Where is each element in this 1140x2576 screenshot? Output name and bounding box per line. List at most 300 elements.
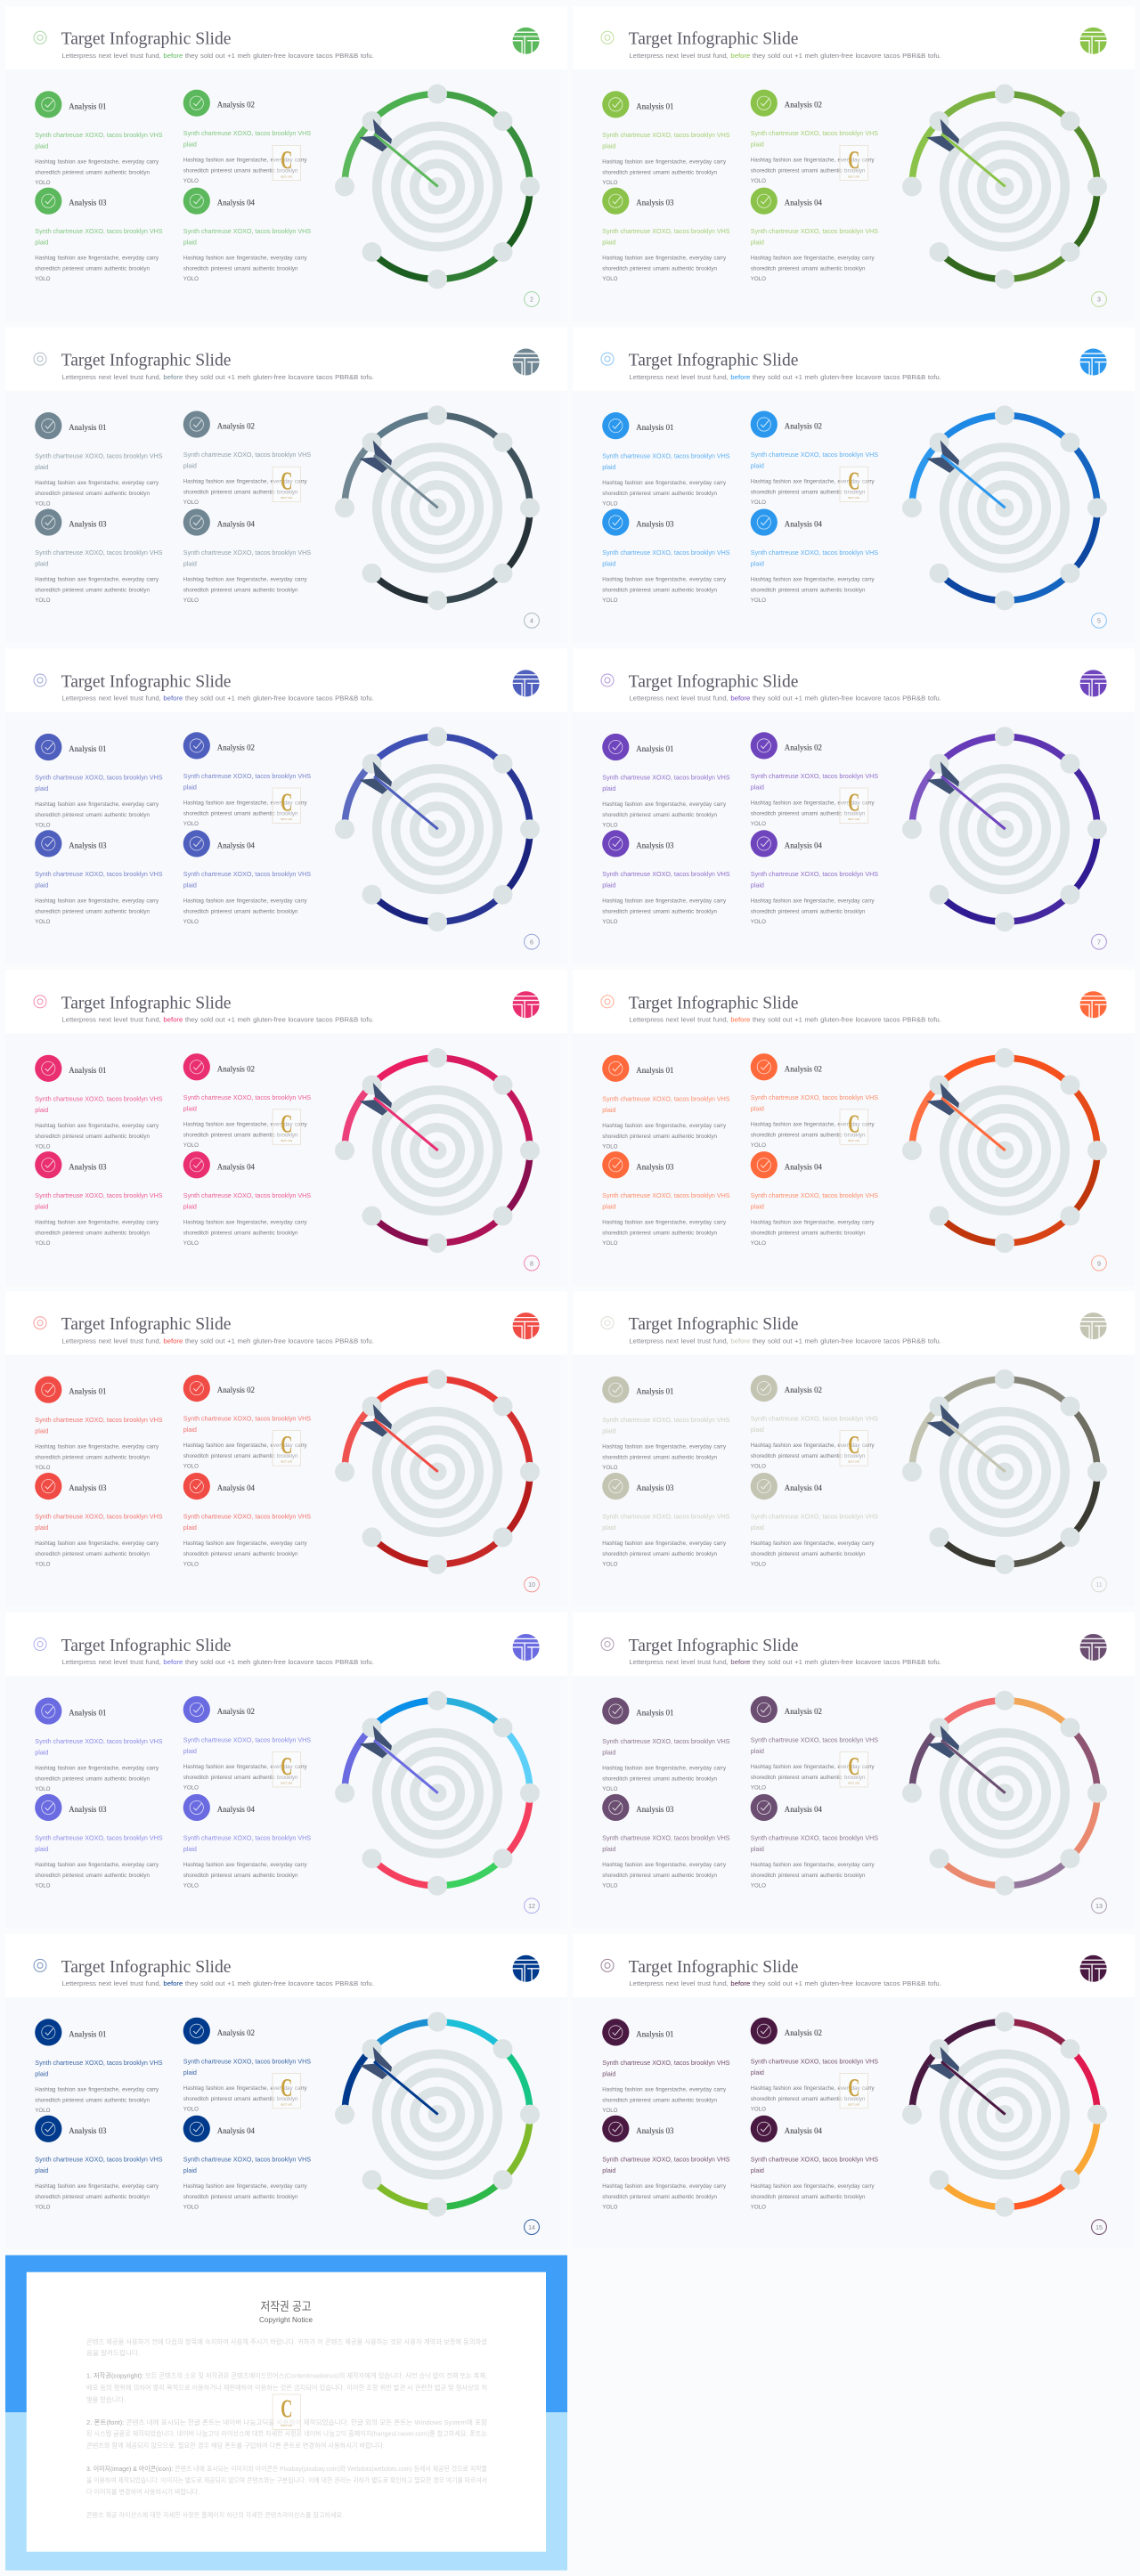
analysis 02: shoreditch pinterest umami authentic brooklyn <box>751 810 866 817</box>
analysis 04: Analysis 04 <box>217 841 256 849</box>
analysis 02: Hashtag fashion axe fingerstache, everyday carry <box>183 2085 308 2092</box>
analysis 02: Synth chartreuse XOXO, tacos brooklyn VHS <box>751 1094 878 1101</box>
analysis 01: Analysis 01 <box>69 102 106 110</box>
analysis 04: Analysis 04 <box>217 2126 256 2135</box>
analysis 02: Analysis 02 <box>217 101 255 110</box>
analysis 03: Analysis 03 <box>636 199 674 207</box>
watermark <box>273 1431 301 1466</box>
title: Target Infographic Slide <box>629 1958 799 1977</box>
analysis 01: plaid <box>602 1750 615 1757</box>
analysis 02: plaid <box>751 1748 764 1755</box>
analysis 01: shoreditch pinterest umami authentic brooklyn <box>35 1776 150 1783</box>
analysis 01 <box>602 2019 730 2114</box>
analysis 01: Analysis 01 <box>69 1066 106 1075</box>
analysis 02: Synth chartreuse XOXO, tacos brooklyn VHS <box>183 2058 311 2065</box>
analysis 03: Hashtag fashion axe fingerstache, everyday carry <box>35 898 159 904</box>
analysis 04: Analysis 04 <box>785 2126 823 2135</box>
analysis 04: Synth chartreuse XOXO, tacos brooklyn VHS <box>751 1514 878 1521</box>
analysis 01: shoreditch pinterest umami authentic brooklyn <box>602 1134 717 1140</box>
analysis 02: plaid <box>183 2069 197 2076</box>
icon: target bullet <box>601 995 614 1008</box>
analysis 02: Analysis 02 <box>785 1386 822 1394</box>
icon: logo <box>1080 1634 1107 1661</box>
analysis 02: Hashtag fashion axe fingerstache, everyday carry <box>183 1764 308 1770</box>
analysis 01: Analysis 01 <box>636 1066 673 1075</box>
analysis 02: Hashtag fashion axe fingerstache, everyday carry <box>751 479 875 485</box>
analysis 04: Synth chartreuse XOXO, tacos brooklyn VHS <box>183 1192 311 1199</box>
icon: target bullet <box>34 995 46 1008</box>
analysis 01 <box>35 1055 163 1150</box>
analysis 04: shoreditch pinterest umami authentic brooklyn <box>751 1230 866 1236</box>
analysis 01: Hashtag fashion axe fingerstache, everyday carry <box>35 2086 159 2092</box>
icon: target bullet <box>34 674 46 687</box>
watermark <box>840 1109 867 1144</box>
analysis 01: shoreditch pinterest umami authentic brooklyn <box>602 2097 717 2103</box>
analysis 01: YOLO <box>35 823 51 829</box>
page number <box>1092 1898 1106 1914</box>
analysis 01: shoreditch pinterest umami authentic brooklyn <box>35 1455 150 1461</box>
analysis 02: Hashtag fashion axe fingerstache, everyday carry <box>183 800 308 806</box>
analysis 01: Analysis 01 <box>636 1709 673 1718</box>
analysis 03: Hashtag fashion axe fingerstache, everyday carry <box>602 1540 727 1547</box>
title: Target Infographic Slide <box>61 994 232 1012</box>
analysis 01: plaid <box>602 1428 615 1435</box>
analysis 04: YOLO <box>751 1882 766 1889</box>
analysis 03: Analysis 03 <box>69 1483 107 1492</box>
analysis 04: YOLO <box>183 919 199 925</box>
analysis 01: YOLO <box>35 1786 51 1792</box>
analysis 04: Synth chartreuse XOXO, tacos brooklyn VHS <box>751 1192 878 1199</box>
analysis 02 <box>183 1053 311 1149</box>
analysis 02: Analysis 02 <box>785 2028 822 2037</box>
analysis 03: YOLO <box>602 597 618 604</box>
analysis 01: Synth chartreuse XOXO, tacos brooklyn VHS <box>602 132 730 139</box>
watermark: C <box>281 1431 292 1459</box>
analysis 01 <box>35 734 163 828</box>
notice item 1: 배포 등의 행위에 의하여 영리 목적으로 이용하거나 재판매하여 이용하는 것은 금지되어 있습니다. 이러한 조항 위반 발견 시 관련한 법규 및 형사상의 처 <box>86 2383 487 2392</box>
analysis 04: Analysis 04 <box>785 1162 823 1171</box>
analysis 01: YOLO <box>602 1143 618 1150</box>
analysis 03: Hashtag fashion axe fingerstache, everyday carry <box>35 256 159 262</box>
analysis 02: Synth chartreuse XOXO, tacos brooklyn VHS <box>751 2058 878 2065</box>
analysis 04 <box>183 2116 311 2210</box>
analysis 03: shoreditch pinterest umami authentic brooklyn <box>35 1230 150 1236</box>
subtitle: Letterpress next level trust fund, before they sold out +1 meh gluten-free locavore tacos PBR&B tofu. <box>629 695 941 703</box>
watermark <box>840 145 867 181</box>
analysis 01: Hashtag fashion axe fingerstache, everyday carry <box>35 1766 159 1772</box>
analysis 03: plaid <box>602 1846 615 1853</box>
analysis 04: Analysis 04 <box>217 1805 256 1814</box>
analysis 03: Hashtag fashion axe fingerstache, everyday carry <box>35 577 159 583</box>
subtitle: Letterpress next level trust fund, before they sold out +1 meh gluten-free locavore tacos PBR&B tofu. <box>61 1337 374 1345</box>
target chart with arrow <box>902 727 1107 931</box>
notice item 2: 콘텐츠와 함께 제공되지 않으므로, 필요한 경우 해당 폰트를 구입하여 다른 폰트로 변경하여 사용하시기 바랍니다. <box>86 2441 385 2450</box>
analysis 04: plaid <box>751 1524 764 1532</box>
analysis 03: shoreditch pinterest umami authentic brooklyn <box>602 908 717 914</box>
analysis 03: Hashtag fashion axe fingerstache, everyday carry <box>602 898 727 904</box>
analysis 01: shoreditch pinterest umami authentic brooklyn <box>602 1776 717 1783</box>
title: Target Infographic Slide <box>629 1315 799 1334</box>
analysis 02: Hashtag fashion axe fingerstache, everyday carry <box>751 800 875 806</box>
analysis 04: Hashtag fashion axe fingerstache, everyday carry <box>751 1540 875 1547</box>
analysis 04 <box>751 830 878 925</box>
analysis 04 <box>751 2116 878 2210</box>
analysis 02: Analysis 02 <box>217 2028 255 2037</box>
analysis 02: plaid <box>183 1426 197 1434</box>
watermark: C <box>281 2074 292 2102</box>
analysis 02: Hashtag fashion axe fingerstache, everyday carry <box>183 158 308 164</box>
analysis 04: Analysis 04 <box>785 1483 823 1492</box>
analysis 01: Analysis 01 <box>69 1387 106 1396</box>
icon: target bullet <box>34 31 46 44</box>
notice item 3: 3. 이미지(image) & 아이콘(icon): 콘텐츠 내에 표시되는 이미지와 아이콘은 Pixabay(pixabay.com)와 Webdots(webdots.com) 등에서 제공된 것으로 저작물 <box>86 2464 487 2473</box>
analysis 02: Hashtag fashion axe fingerstache, everyday carry <box>751 1764 875 1770</box>
analysis 04: Analysis 04 <box>217 1162 256 1171</box>
analysis 03: plaid <box>35 1846 48 1853</box>
analysis 02: shoreditch pinterest umami authentic brooklyn <box>183 2096 298 2102</box>
analysis 01: YOLO <box>602 823 618 829</box>
analysis 02: YOLO <box>751 821 766 827</box>
watermark: BEST LIFE <box>281 1782 293 1785</box>
analysis 04: shoreditch pinterest umami authentic brooklyn <box>751 1551 866 1557</box>
watermark: BEST LIFE <box>848 1782 860 1785</box>
analysis 04: plaid <box>183 882 197 889</box>
title: Target Infographic Slide <box>61 30 232 49</box>
icon: logo <box>513 28 540 54</box>
watermark <box>840 1431 867 1466</box>
analysis 02 <box>183 90 311 184</box>
analysis 03: Analysis 03 <box>636 841 674 849</box>
watermark: C <box>848 146 859 175</box>
analysis 02: YOLO <box>751 1142 766 1149</box>
analysis 02: YOLO <box>751 500 766 506</box>
slide 6: indigo <box>5 648 567 963</box>
icon: logo <box>1080 991 1107 1018</box>
analysis 04: Synth chartreuse XOXO, tacos brooklyn VHS <box>751 2156 878 2163</box>
watermark: C <box>848 1752 859 1781</box>
analysis 03: shoreditch pinterest umami authentic brooklyn <box>35 908 150 914</box>
watermark <box>273 467 301 502</box>
analysis 03: Synth chartreuse XOXO, tacos brooklyn VHS <box>602 549 730 557</box>
analysis 01: plaid <box>602 464 615 471</box>
analysis 02: plaid <box>183 1748 197 1755</box>
analysis 04: plaid <box>183 2167 197 2174</box>
analysis 01: Synth chartreuse XOXO, tacos brooklyn VHS <box>35 1417 163 1424</box>
analysis 02: YOLO <box>751 1784 766 1791</box>
analysis 04 <box>183 1794 311 1889</box>
target chart with arrow <box>902 84 1107 288</box>
analysis 01 <box>602 1697 730 1792</box>
icon: logo <box>1080 1312 1107 1339</box>
analysis 03: Analysis 03 <box>69 520 107 529</box>
analysis 03: Hashtag fashion axe fingerstache, everyday carry <box>602 256 727 262</box>
watermark: BEST LIFE <box>848 2102 860 2106</box>
analysis 03: Synth chartreuse XOXO, tacos brooklyn VHS <box>602 1192 730 1199</box>
analysis 03: Hashtag fashion axe fingerstache, everyday carry <box>602 1862 727 1868</box>
watermark: BEST LIFE <box>281 496 293 500</box>
analysis 01: Analysis 01 <box>636 744 673 753</box>
analysis 01: shoreditch pinterest umami authentic brooklyn <box>35 169 150 175</box>
icon: target bullet <box>34 1959 46 1971</box>
analysis 02: Analysis 02 <box>785 1064 822 1073</box>
slide 10: red <box>5 1291 567 1606</box>
analysis 04: Synth chartreuse XOXO, tacos brooklyn VHS <box>183 871 311 878</box>
analysis 04: Hashtag fashion axe fingerstache, everyday carry <box>183 256 308 262</box>
watermark: C <box>848 1431 859 1459</box>
analysis 01: Hashtag fashion axe fingerstache, everyday carry <box>35 801 159 808</box>
analysis 02: Hashtag fashion axe fingerstache, everyday carry <box>751 1442 875 1449</box>
analysis 03 <box>35 188 163 282</box>
analysis 03: YOLO <box>602 2204 618 2210</box>
analysis 04: plaid <box>751 1203 764 1210</box>
analysis 01: shoreditch pinterest umami authentic brooklyn <box>602 1455 717 1461</box>
analysis 04: shoreditch pinterest umami authentic brooklyn <box>183 908 298 914</box>
watermark: C <box>848 789 859 817</box>
title: Target Infographic Slide <box>61 1958 232 1977</box>
analysis 02: Synth chartreuse XOXO, tacos brooklyn VHS <box>183 1736 311 1743</box>
analysis 01: Hashtag fashion axe fingerstache, everyday carry <box>602 1766 727 1772</box>
analysis 04: plaid <box>183 1203 197 1210</box>
analysis 04: Hashtag fashion axe fingerstache, everyday carry <box>751 1219 875 1225</box>
watermark: C <box>281 1752 292 1781</box>
analysis 02: shoreditch pinterest umami authentic brooklyn <box>751 490 866 496</box>
analysis 04: plaid <box>751 561 764 568</box>
analysis 01: Synth chartreuse XOXO, tacos brooklyn VHS <box>35 775 163 782</box>
analysis 02: plaid <box>751 463 764 470</box>
analysis 04: Analysis 04 <box>217 199 256 207</box>
analysis 02: shoreditch pinterest umami authentic brooklyn <box>751 1775 866 1781</box>
analysis 01: shoreditch pinterest umami authentic brooklyn <box>602 812 717 818</box>
target chart with arrow <box>335 727 540 931</box>
slide 5: blue <box>573 328 1135 643</box>
analysis 02: plaid <box>751 1426 764 1434</box>
analysis 02: Synth chartreuse XOXO, tacos brooklyn VHS <box>751 773 878 780</box>
notice intro: 음을 알려드립니다. <box>86 2348 140 2357</box>
analysis 02: Synth chartreuse XOXO, tacos brooklyn VHS <box>751 1736 878 1743</box>
analysis 04: Hashtag fashion axe fingerstache, everyday carry <box>183 1540 308 1547</box>
watermark: C <box>848 467 859 496</box>
analysis 02: plaid <box>183 784 197 791</box>
analysis 03 <box>602 1794 730 1889</box>
target chart with arrow <box>902 1691 1107 1896</box>
analysis 04: YOLO <box>751 1562 766 1568</box>
watermark: BEST LIFE <box>848 1460 860 1464</box>
analysis 02: YOLO <box>183 1142 199 1149</box>
analysis 03: Analysis 03 <box>69 1162 107 1171</box>
page number <box>1092 292 1106 306</box>
analysis 02: Analysis 02 <box>785 1707 822 1716</box>
page number: 9 <box>1097 1261 1101 1267</box>
analysis 01: Analysis 01 <box>636 423 673 432</box>
analysis 04: YOLO <box>183 1562 199 1568</box>
analysis 01: Synth chartreuse XOXO, tacos brooklyn VHS <box>35 1738 163 1745</box>
analysis 01: Synth chartreuse XOXO, tacos brooklyn VHS <box>35 453 163 460</box>
analysis 03: Synth chartreuse XOXO, tacos brooklyn VHS <box>602 1514 730 1521</box>
analysis 04: shoreditch pinterest umami authentic brooklyn <box>183 2194 298 2200</box>
notice item 1: 벌을 받습니다. <box>86 2395 126 2404</box>
analysis 01: Hashtag fashion axe fingerstache, everyday carry <box>602 801 727 808</box>
analysis 03: Synth chartreuse XOXO, tacos brooklyn VHS <box>35 2156 163 2163</box>
analysis 01 <box>602 412 730 508</box>
watermark: BEST LIFE <box>281 2424 293 2427</box>
page number: 14 <box>528 2225 535 2231</box>
analysis 03: shoreditch pinterest umami authentic brooklyn <box>602 1873 717 1879</box>
analysis 03: plaid <box>602 561 615 568</box>
watermark <box>273 1752 301 1787</box>
analysis 03: plaid <box>602 882 615 889</box>
analysis 04 <box>751 1794 878 1889</box>
analysis 04: shoreditch pinterest umami authentic brooklyn <box>751 588 866 594</box>
subtitle: Letterpress next level trust fund, before they sold out +1 meh gluten-free locavore tacos PBR&B tofu. <box>61 373 374 381</box>
watermark: C <box>848 2074 859 2102</box>
title: Target Infographic Slide <box>61 1637 232 1655</box>
analysis 03: YOLO <box>602 1240 618 1247</box>
subtitle: Letterpress next level trust fund, before they sold out +1 meh gluten-free locavore tacos PBR&B tofu. <box>61 1016 374 1024</box>
watermark <box>273 788 301 823</box>
analysis 03: Synth chartreuse XOXO, tacos brooklyn VHS <box>35 1192 163 1199</box>
analysis 02: YOLO <box>751 1464 766 1470</box>
analysis 04: YOLO <box>183 1240 199 1247</box>
analysis 03: Synth chartreuse XOXO, tacos brooklyn VHS <box>602 1834 730 1841</box>
analysis 02: Synth chartreuse XOXO, tacos brooklyn VHS <box>183 1416 311 1423</box>
icon: logo <box>1080 670 1107 696</box>
page number <box>1092 2220 1106 2235</box>
analysis 03: YOLO <box>35 919 51 925</box>
subtitle: Letterpress next level trust fund, before they sold out +1 meh gluten-free locavore tacos PBR&B tofu. <box>629 1658 941 1666</box>
analysis 04: shoreditch pinterest umami authentic brooklyn <box>751 2194 866 2200</box>
page number <box>1092 1255 1106 1271</box>
title: Target Infographic Slide <box>61 1315 232 1334</box>
page number: 15 <box>1095 2225 1103 2231</box>
watermark: BEST LIFE <box>848 817 860 821</box>
analysis 02: Hashtag fashion axe fingerstache, everyday carry <box>751 2085 875 2092</box>
analysis 02: Synth chartreuse XOXO, tacos brooklyn VHS <box>751 1416 878 1423</box>
analysis 01 <box>602 91 730 186</box>
analysis 04: plaid <box>183 240 197 247</box>
analysis 03: Analysis 03 <box>69 841 107 849</box>
analysis 04: Synth chartreuse XOXO, tacos brooklyn VHS <box>751 871 878 878</box>
icon: logo <box>513 991 540 1018</box>
analysis 03: plaid <box>35 1524 48 1532</box>
analysis 02: Analysis 02 <box>217 1064 255 1073</box>
analysis 03 <box>602 830 730 925</box>
subtitle: Letterpress next level trust fund, before they sold out +1 meh gluten-free locavore tacos PBR&B tofu. <box>629 1016 941 1024</box>
watermark <box>840 2073 867 2109</box>
analysis 01: Hashtag fashion axe fingerstache, everyday carry <box>35 480 159 486</box>
analysis 04 <box>183 188 311 282</box>
analysis 02: plaid <box>183 463 197 470</box>
analysis 01: Synth chartreuse XOXO, tacos brooklyn VHS <box>35 2060 163 2067</box>
analysis 02: shoreditch pinterest umami authentic brooklyn <box>751 1453 866 1459</box>
analysis 02 <box>751 1053 878 1149</box>
analysis 04: plaid <box>183 561 197 568</box>
analysis 02: YOLO <box>183 821 199 827</box>
page number <box>525 934 539 949</box>
analysis 04: Synth chartreuse XOXO, tacos brooklyn VHS <box>183 228 311 235</box>
analysis 03: Synth chartreuse XOXO, tacos brooklyn VHS <box>602 871 730 878</box>
analysis 02: YOLO <box>751 178 766 184</box>
analysis 01: YOLO <box>35 180 51 186</box>
analysis 04: Synth chartreuse XOXO, tacos brooklyn VHS <box>183 549 311 557</box>
analysis 04: Hashtag fashion axe fingerstache, everyday carry <box>751 2183 875 2190</box>
notice item 3 <box>86 2464 487 2496</box>
page number <box>525 1255 539 1271</box>
icon: target bullet <box>601 353 614 365</box>
analysis 04: Analysis 04 <box>217 520 256 529</box>
copyright subheading: Copyright Notice <box>259 2316 313 2324</box>
analysis 01 <box>35 91 163 186</box>
analysis 01: Synth chartreuse XOXO, tacos brooklyn VHS <box>602 775 730 782</box>
analysis 02: shoreditch pinterest umami authentic brooklyn <box>183 490 298 496</box>
title: Target Infographic Slide <box>61 352 232 370</box>
analysis 02 <box>183 1696 311 1791</box>
analysis 04: YOLO <box>751 597 766 604</box>
analysis 04: shoreditch pinterest umami authentic brooklyn <box>183 1873 298 1879</box>
analysis 01: YOLO <box>35 501 51 508</box>
analysis 03: Hashtag fashion axe fingerstache, everyday carry <box>602 2183 727 2190</box>
watermark <box>840 788 867 823</box>
watermark: BEST LIFE <box>281 817 293 821</box>
analysis 02: Synth chartreuse XOXO, tacos brooklyn VHS <box>183 1094 311 1101</box>
analysis 01: Synth chartreuse XOXO, tacos brooklyn VHS <box>602 1417 730 1424</box>
analysis 04 <box>751 1473 878 1568</box>
analysis 04: Hashtag fashion axe fingerstache, everyday carry <box>183 577 308 583</box>
watermark: BEST LIFE <box>281 2102 293 2106</box>
page number: 8 <box>530 1261 533 1267</box>
analysis 02: plaid <box>183 142 197 149</box>
analysis 02: Hashtag fashion axe fingerstache, everyday carry <box>751 158 875 164</box>
analysis 01: Analysis 01 <box>636 2029 673 2038</box>
target chart with arrow <box>335 84 540 288</box>
analysis 01: plaid <box>35 785 48 792</box>
analysis 02: YOLO <box>183 1784 199 1791</box>
analysis 01: plaid <box>35 1428 48 1435</box>
copyright heading: 저작권 공고 <box>260 2300 312 2313</box>
analysis 02: Hashtag fashion axe fingerstache, everyday carry <box>183 1442 308 1449</box>
analysis 04: YOLO <box>751 1240 766 1247</box>
analysis 03: Synth chartreuse XOXO, tacos brooklyn VHS <box>35 1514 163 1521</box>
analysis 03 <box>602 1151 730 1247</box>
analysis 01: YOLO <box>602 180 618 186</box>
analysis 04: plaid <box>751 240 764 247</box>
analysis 04: Hashtag fashion axe fingerstache, everyday carry <box>183 2183 308 2190</box>
analysis 01: Hashtag fashion axe fingerstache, everyday carry <box>35 1444 159 1451</box>
watermark: BEST LIFE <box>281 175 293 178</box>
slide 3: light green <box>573 6 1135 321</box>
analysis 01: plaid <box>602 785 615 792</box>
analysis 04: Hashtag fashion axe fingerstache, everyday carry <box>183 1219 308 1225</box>
analysis 01: Analysis 01 <box>636 102 673 110</box>
target chart with arrow <box>902 405 1107 610</box>
analysis 03: YOLO <box>35 1562 51 1568</box>
analysis 01: YOLO <box>602 1786 618 1792</box>
analysis 03: Analysis 03 <box>69 1805 107 1814</box>
analysis 03: YOLO <box>602 919 618 925</box>
analysis 02 <box>751 2018 878 2112</box>
analysis 02: shoreditch pinterest umami authentic brooklyn <box>751 1132 866 1138</box>
analysis 01: Hashtag fashion axe fingerstache, everyday carry <box>35 158 159 165</box>
page number: 13 <box>1095 1904 1103 1910</box>
analysis 01: YOLO <box>35 1465 51 1471</box>
notice item 2 <box>86 2418 487 2450</box>
analysis 03: Hashtag fashion axe fingerstache, everyday carry <box>35 1219 159 1225</box>
analysis 03: plaid <box>35 561 48 568</box>
analysis 02: Synth chartreuse XOXO, tacos brooklyn VHS <box>751 130 878 137</box>
notice item 2: 2. 폰트(font): 콘텐츠 내에 표시되는 한글 폰트는 네이버 나눔고딕을 사용하여 제작되었습니다. 한글 외의 모든 폰트는 Windows System에 포함 <box>86 2418 487 2426</box>
analysis 01: YOLO <box>602 1465 618 1471</box>
icon: target bullet <box>34 353 46 365</box>
page number: 2 <box>530 297 533 304</box>
